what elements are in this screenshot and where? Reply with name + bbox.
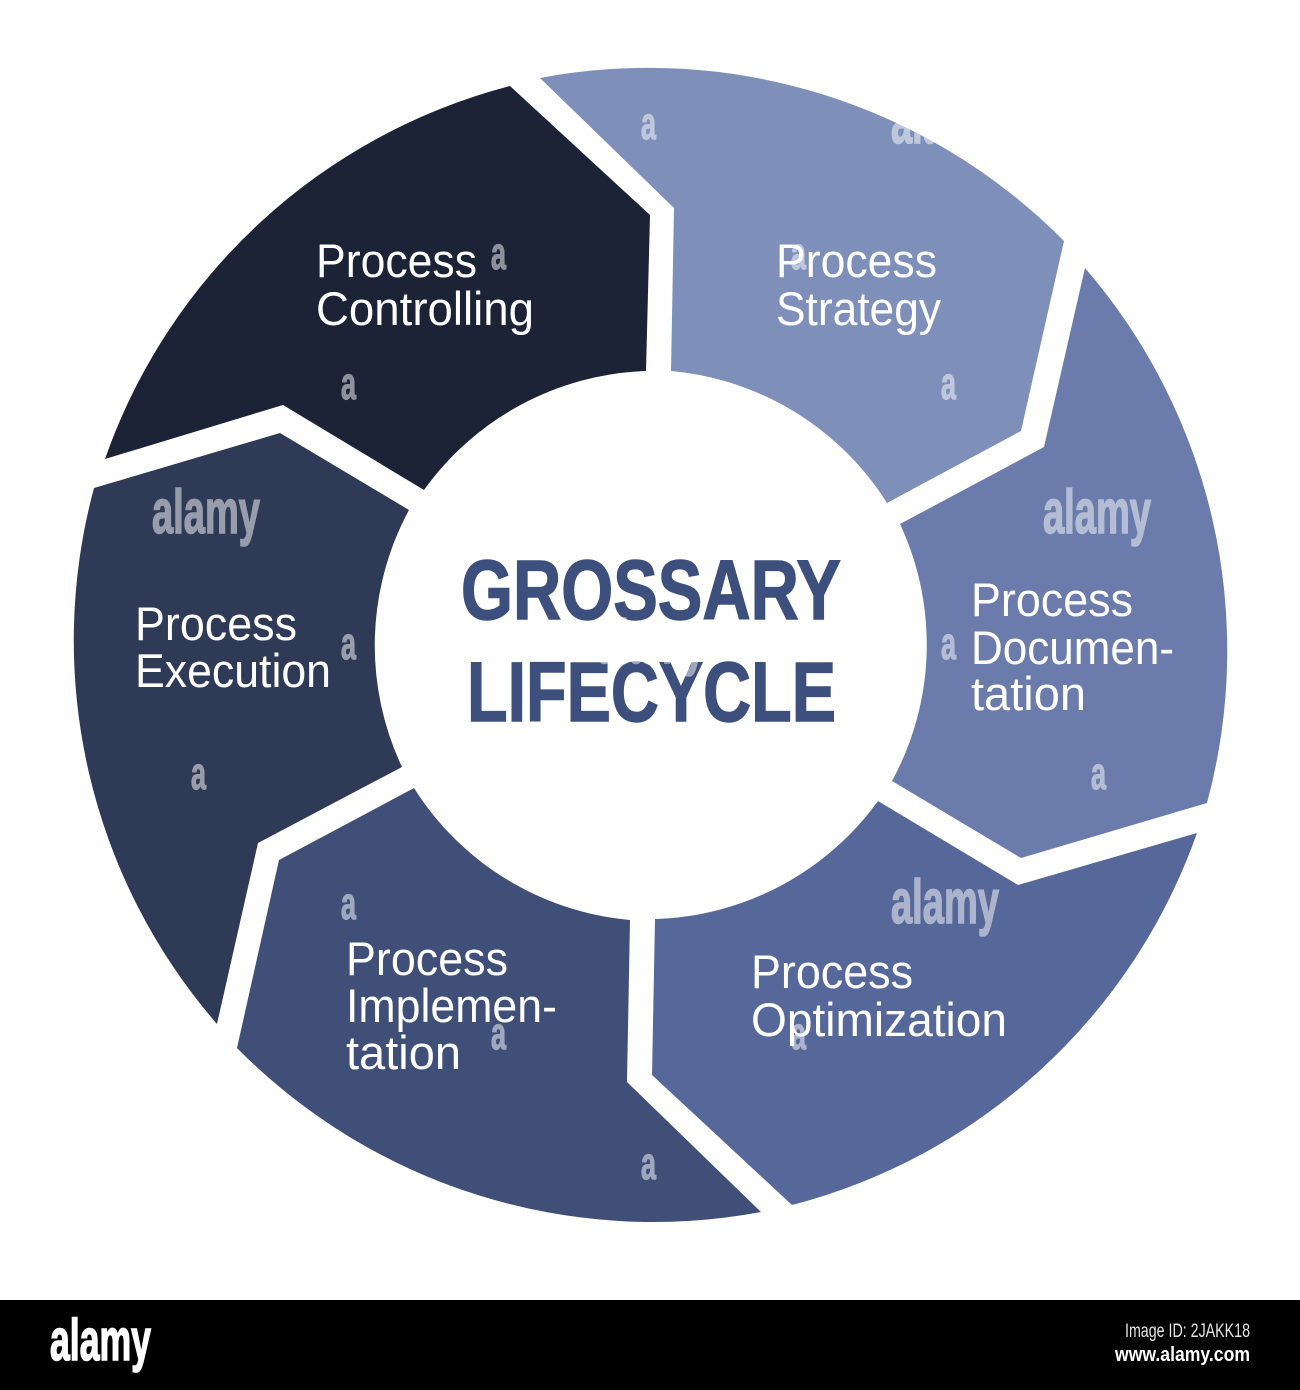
segment: process documentation bbox=[892, 268, 1227, 858]
segment: process execution bbox=[74, 433, 409, 1024]
watermarks: alamy bbox=[1043, 478, 1151, 547]
watermarks: a bbox=[791, 1008, 807, 1059]
watermarks: alamy bbox=[891, 868, 999, 937]
watermarks: a bbox=[1091, 748, 1107, 799]
segment: process controlling: Process bbox=[316, 234, 477, 287]
segment: process controlling bbox=[105, 86, 650, 490]
watermarks: a bbox=[641, 98, 657, 149]
segment: process optimization: Optimization bbox=[751, 993, 1007, 1046]
segment: process controlling: Controlling bbox=[316, 282, 534, 335]
watermarks bbox=[152, 88, 1151, 1189]
segment: process documentation: tation bbox=[971, 667, 1086, 720]
segment: process execution: Execution bbox=[135, 644, 331, 697]
center title bbox=[461, 543, 841, 739]
footer bar bbox=[0, 1300, 1300, 1390]
watermarks: a bbox=[191, 748, 207, 799]
segment: process documentation: Process bbox=[971, 573, 1133, 626]
segment: process implementation: Process bbox=[346, 932, 508, 985]
watermarks: a bbox=[341, 878, 357, 929]
segment: process optimization: Process bbox=[751, 945, 913, 998]
footer bar: www.alamy.com bbox=[1114, 1344, 1250, 1366]
segment: process execution: Process bbox=[135, 597, 297, 650]
segment: process strategy: Process bbox=[776, 234, 937, 287]
center title: LIFECYCLE bbox=[467, 645, 836, 739]
segment: process implementation: Implemen- bbox=[346, 979, 557, 1032]
watermarks: alamy bbox=[597, 608, 705, 677]
watermarks: alamy bbox=[152, 478, 260, 547]
watermarks: a bbox=[341, 358, 357, 409]
watermarks: a bbox=[941, 618, 957, 669]
segment: process implementation bbox=[237, 788, 761, 1222]
watermarks: a bbox=[941, 358, 957, 409]
center title: GROSSARY bbox=[461, 543, 841, 637]
watermarks: a bbox=[791, 228, 807, 279]
lifecycle wheel bbox=[74, 68, 1227, 1222]
watermarks: a bbox=[491, 228, 507, 279]
footer bar: Image ID: 2JAKK18 bbox=[1125, 1321, 1250, 1342]
watermarks: alamy bbox=[891, 88, 999, 157]
watermarks: a bbox=[341, 618, 357, 669]
segment: process strategy: Strategy bbox=[776, 282, 941, 335]
segment: process strategy bbox=[540, 68, 1064, 503]
segment: process implementation: tation bbox=[346, 1026, 461, 1079]
footer bar: alamy bbox=[50, 1308, 151, 1373]
segment: process documentation: Documen- bbox=[971, 621, 1174, 674]
watermarks: a bbox=[641, 1138, 657, 1189]
segment: process optimization bbox=[652, 801, 1197, 1205]
watermarks: a bbox=[491, 1008, 507, 1059]
